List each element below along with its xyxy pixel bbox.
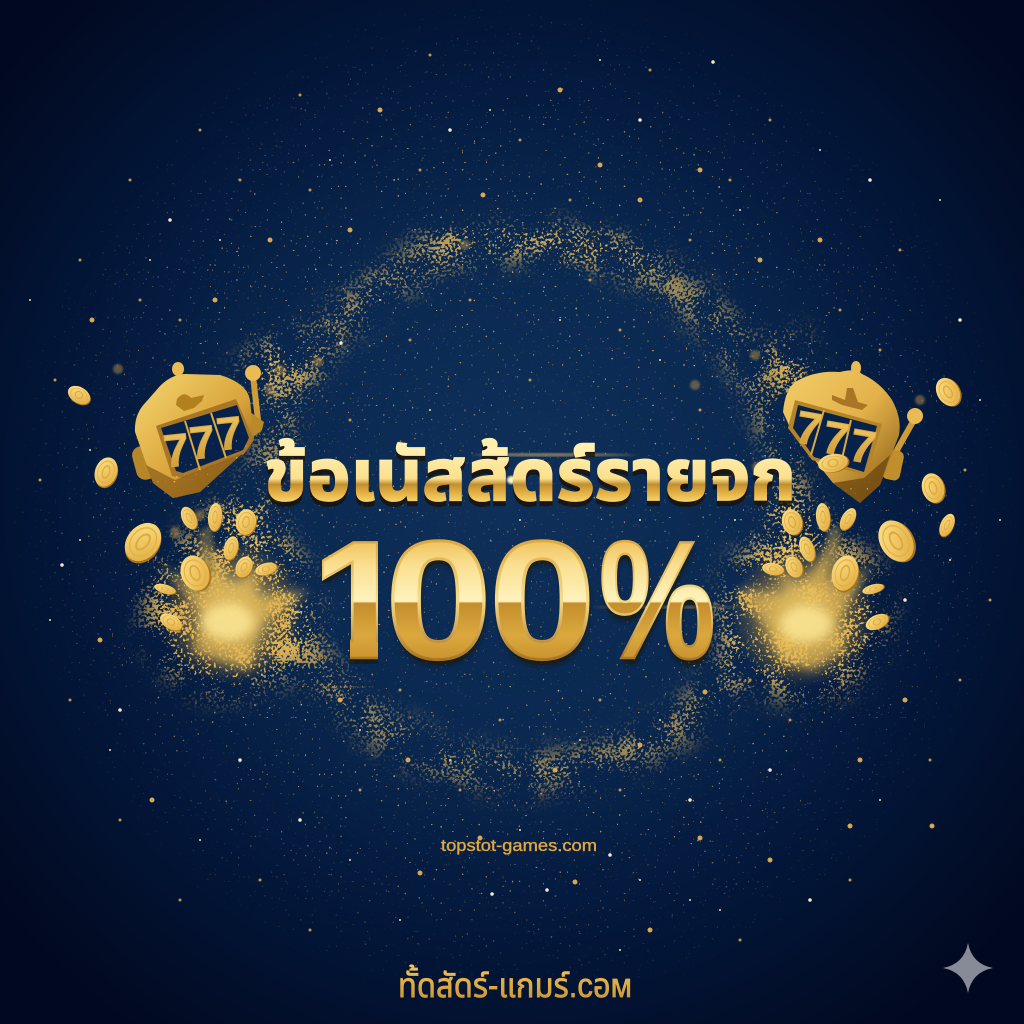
headline number: 100%: 1 bbox=[310, 513, 411, 701]
headline number: 100% bbox=[322, 539, 714, 668]
headline number: 100%: 0 bbox=[386, 513, 493, 700]
right gold explosion bbox=[731, 525, 875, 687]
headline number: 100%: 0 bbox=[489, 507, 596, 694]
title: Thai headline: ข้อเนัสส้ดร์รายจก bbox=[264, 436, 796, 516]
icon: left slot machine: 7 bbox=[187, 415, 218, 469]
icon: right slot machine: 7 bbox=[792, 400, 826, 456]
headline number: 100%: % bbox=[600, 512, 716, 700]
icon: right slot machine bbox=[783, 361, 923, 503]
icon: left slot machine: 7 bbox=[214, 406, 245, 460]
gold dust ring bbox=[124, 204, 910, 810]
footer Thai website label: ทั้ดสัดร์-แกมร์.cอм bbox=[398, 964, 632, 1005]
headline number: 100%: % bbox=[599, 506, 716, 694]
website label: topstot-games.com bbox=[441, 836, 597, 855]
icon: sparkle watermark bbox=[943, 943, 993, 993]
headline number: 100%: 1 bbox=[310, 507, 411, 695]
icon: right slot machine: 7 bbox=[819, 410, 853, 466]
headline number: 100%: 0 bbox=[385, 507, 492, 694]
coins left bbox=[64, 382, 279, 635]
title: Thai headline: ข้อเนัสส้ดร์รายจก bbox=[264, 441, 796, 521]
lens flares bbox=[470, 453, 745, 608]
headline number: 100%: 0 bbox=[490, 513, 597, 700]
icon: left slot machine bbox=[130, 362, 264, 498]
dust over slot machines bbox=[157, 432, 880, 514]
icon: right slot machine: 7 bbox=[846, 418, 880, 474]
icon: left slot machine: 7 bbox=[161, 423, 192, 477]
coins right bbox=[761, 373, 967, 634]
left gold explosion bbox=[160, 525, 310, 684]
